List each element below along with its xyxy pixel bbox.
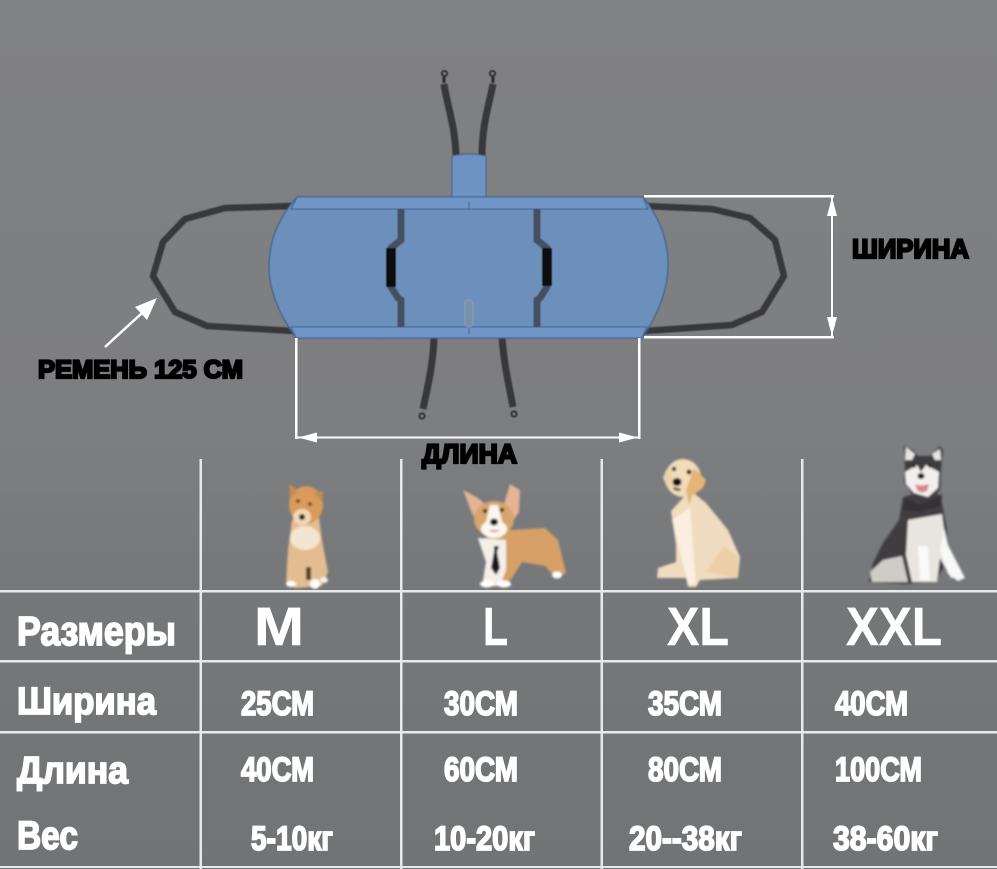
left inner handle (391, 209, 401, 327)
width values: 25СМ (241, 685, 314, 723)
lower rings (419, 411, 517, 419)
weight values: 20--38кг (629, 820, 742, 858)
row heading: sizes: Размеры (17, 608, 176, 654)
table grid (0, 459, 997, 869)
blue body panel (269, 197, 668, 338)
right belt loop (645, 206, 784, 331)
upper left strap (444, 84, 456, 155)
weight values (251, 820, 938, 858)
band seams (468, 201, 470, 335)
length values (241, 751, 922, 789)
width values (241, 685, 908, 723)
bottom band (291, 327, 647, 338)
row heading: weight: Вес (17, 814, 78, 858)
lower left strap (423, 338, 434, 409)
right black grip (542, 248, 552, 286)
width values: 40СМ (835, 685, 908, 723)
length values: 60СМ (444, 751, 518, 789)
label: width: ШИРИНА (852, 234, 969, 264)
length values: 100СМ (835, 751, 922, 789)
belt arrow (105, 298, 157, 347)
left belt loop (153, 206, 293, 331)
dog: husky XXL (869, 446, 965, 584)
weight values: 10-20кг (434, 820, 535, 858)
left black grip (386, 248, 396, 287)
size M: M (254, 597, 304, 657)
right inner handle (537, 209, 547, 327)
size L: L (483, 597, 508, 657)
top band (291, 197, 648, 209)
length dimension (295, 338, 640, 442)
weight values: 38-60кг (833, 820, 938, 858)
length values: 80СМ (648, 751, 722, 789)
dog: corgi L (463, 484, 566, 588)
row heading: width: Ширина (17, 681, 157, 723)
size XL: XL (667, 597, 729, 657)
row heading: length: Длина (17, 750, 129, 792)
label: belt: РЕМЕНЬ 125 СМ (38, 356, 243, 384)
top tab (452, 154, 486, 197)
width values: 35СМ (648, 685, 722, 723)
weight values: 5-10кг (251, 820, 333, 858)
label: length: ДЛИНА (422, 439, 517, 469)
upper right strap (482, 84, 493, 155)
length values: 40СМ (241, 751, 314, 789)
dog: labrador XL (657, 459, 740, 587)
centre slot (465, 300, 473, 327)
harness diagram (153, 71, 784, 419)
lower right strap (502, 338, 513, 407)
size XXL: XXL (846, 597, 942, 657)
dog: shiba M (286, 484, 328, 589)
upper rings (442, 71, 495, 83)
width values: 30СМ (444, 685, 518, 723)
width dimension (644, 195, 837, 338)
